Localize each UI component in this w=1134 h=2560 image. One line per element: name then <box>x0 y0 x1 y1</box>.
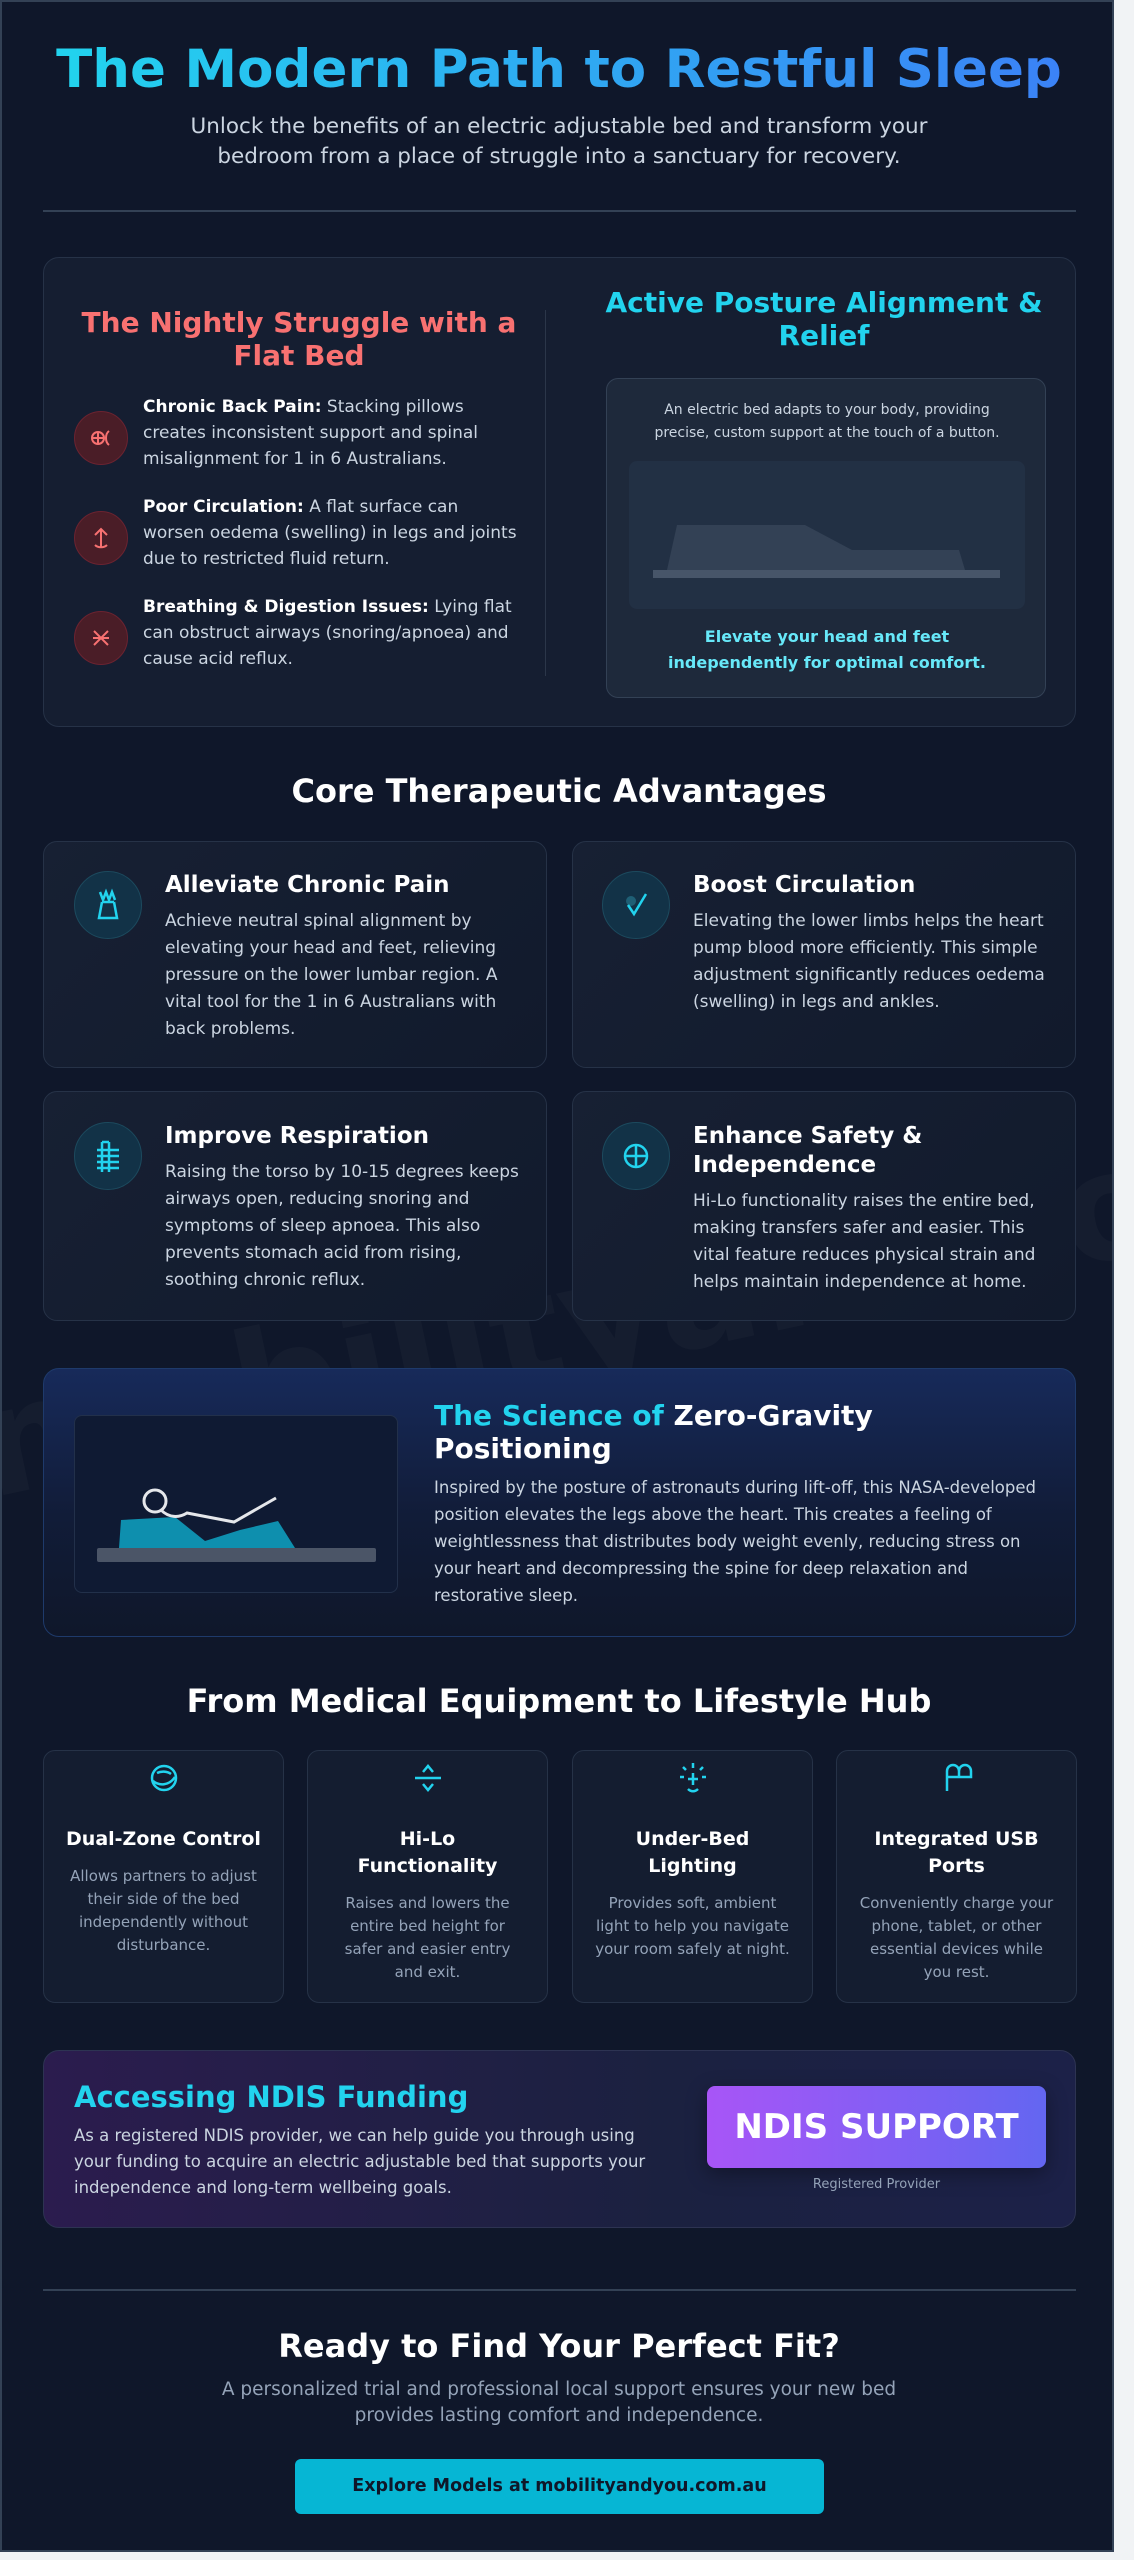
title: Accessing NDIS Funding <box>74 2080 468 2114</box>
title: Boost Circulation <box>693 872 915 898</box>
feature: lighting: Provides soft, ambient light to help you navigate your room safely at night. <box>595 1894 790 1958</box>
feature: hi-lo: Raises and lowers the entire bed height for safer and easier entry and exit. <box>345 1894 510 1981</box>
caption: Elevate your head and feet independently for optimal comfort. <box>668 627 986 672</box>
body: Raising the torso by 10-15 degrees keeps airways open, reducing snoring and symptoms of sleep apnoea. This also prevents stomach acid from rising, soothing chronic reflux. <box>165 1162 519 1290</box>
text: adapts: An electric bed adapts to your body, providing precise, custom support at the touch of a button. <box>654 402 1000 441</box>
icon <box>415 1764 441 1792</box>
title: Improve Respiration <box>165 1123 429 1149</box>
icon: crosshair <box>602 1122 670 1190</box>
illustration: bed <box>629 461 1025 609</box>
title: Enhance Safety & Independence <box>693 1123 922 1178</box>
card: circulation <box>572 841 1076 1068</box>
feature: hi-lo: Hi-Lo Functionality <box>358 1828 497 1877</box>
feature: lighting <box>572 1750 813 2003</box>
body: Achieve neutral spinal alignment by elevating your head and feet, relieving pressure on the lower lumbar region. A vital tool for the 1 in 6 Australians with back problems. <box>165 911 497 1039</box>
illustration: zero gravity <box>74 1415 398 1593</box>
text: CTA: A personalized trial and professional local support ensures your new bed provides lasting comfort and independence. <box>222 2379 896 2426</box>
caption: Registered Provider <box>813 2177 940 2192</box>
card: safety <box>572 1091 1076 1321</box>
feature: usb: Integrated USB Ports <box>874 1828 1039 1877</box>
body: Inspired by the posture of astronauts during lift-off, this NASA-developed position elevates the legs above the heart. This creates a feeling of weightlessness that distributes body weight evenly, reducing stress on your heart and decompressing the spine for deep relaxation and restorative sleep. <box>434 1478 1036 1605</box>
badge: NDIS support: NDIS SUPPORT <box>734 2107 1019 2147</box>
heading: core advantages: Core Therapeutic Advantages <box>292 772 826 810</box>
text: back pain: Chronic Back Pain: Stacking pillows creates inconsistent support and spinal misalignment for 1 in 6 Australians. <box>143 397 478 469</box>
heading: active posture: Active Posture Alignment & Relief <box>605 286 1043 352</box>
panel: zero gravity <box>43 1368 1076 1637</box>
title: The Modern Path to Restful Sleep <box>56 39 1062 100</box>
feature: hi-lo <box>307 1750 548 2003</box>
title: Alleviate Chronic Pain <box>165 872 449 898</box>
icon <box>680 1763 706 1792</box>
panel: struggle vs relief <box>43 257 1076 727</box>
body: Elevating the lower limbs helps the heart pump blood more efficiently. This simple adjustment significantly reduces oedema (swelling) in legs and ankles. <box>693 911 1045 1012</box>
button: explore <box>295 2459 824 2514</box>
icon: pain <box>74 871 142 939</box>
card: chronic pain <box>43 841 547 1068</box>
icon: lungs grid <box>74 1122 142 1190</box>
panel: NDIS <box>43 2050 1076 2228</box>
feature: usb <box>836 1750 1077 2003</box>
feature: lighting: Under-Bed Lighting <box>636 1828 749 1877</box>
icon: back pain <box>74 411 128 465</box>
text: breathing: Breathing & Digestion Issues: Lying flat can obstruct airways (snoring/apnoea) and cause acid reflux. <box>143 597 512 669</box>
card: respiration <box>43 1091 547 1321</box>
subtitle: Unlock the benefits of an electric adjustable bed and transform your bedroom from a place of struggle into a sanctuary for recovery. <box>191 114 927 169</box>
heading: lifestyle hub: From Medical Equipment to Lifestyle Hub <box>187 1682 931 1720</box>
text: circulation: Poor Circulation: A flat surface can worsen oedema (swelling) in legs and joints due to restricted fluid return. <box>143 497 517 569</box>
icon: breathing <box>74 611 128 665</box>
inner box: electric bed <box>606 378 1046 698</box>
icon: circulation <box>74 511 128 565</box>
heading: nightly struggle: The Nightly Struggle with a Flat Bed <box>82 306 516 372</box>
feature: dual zone <box>43 1750 284 2003</box>
body: As a registered NDIS provider, we can help guide you through using your funding to acquire an electric adjustable bed that supports your independence and long-term wellbeing goals. <box>74 2126 645 2197</box>
button: explore: Explore Models at mobilityandyou.com.au <box>352 2476 767 2496</box>
feature: usb: Conveniently charge your phone, tablet, or other essential devices while you rest. <box>860 1894 1053 1981</box>
icon: check <box>602 871 670 939</box>
icon <box>150 1764 178 1792</box>
feature: dual zone: Allows partners to adjust their side of the bed independently without disturbance. <box>70 1867 257 1954</box>
icon <box>946 1764 972 1791</box>
title: The Science of Zero-Gravity Positioning <box>434 1399 873 1465</box>
badge: NDIS support <box>707 2086 1046 2168</box>
heading: CTA: Ready to Find Your Perfect Fit? <box>278 2327 840 2365</box>
body: Hi-Lo functionality raises the entire bed, making transfers safer and easier. This vital feature reduces physical strain and helps maintain independence at home. <box>693 1191 1035 1292</box>
feature: dual zone: Dual-Zone Control <box>66 1828 261 1850</box>
